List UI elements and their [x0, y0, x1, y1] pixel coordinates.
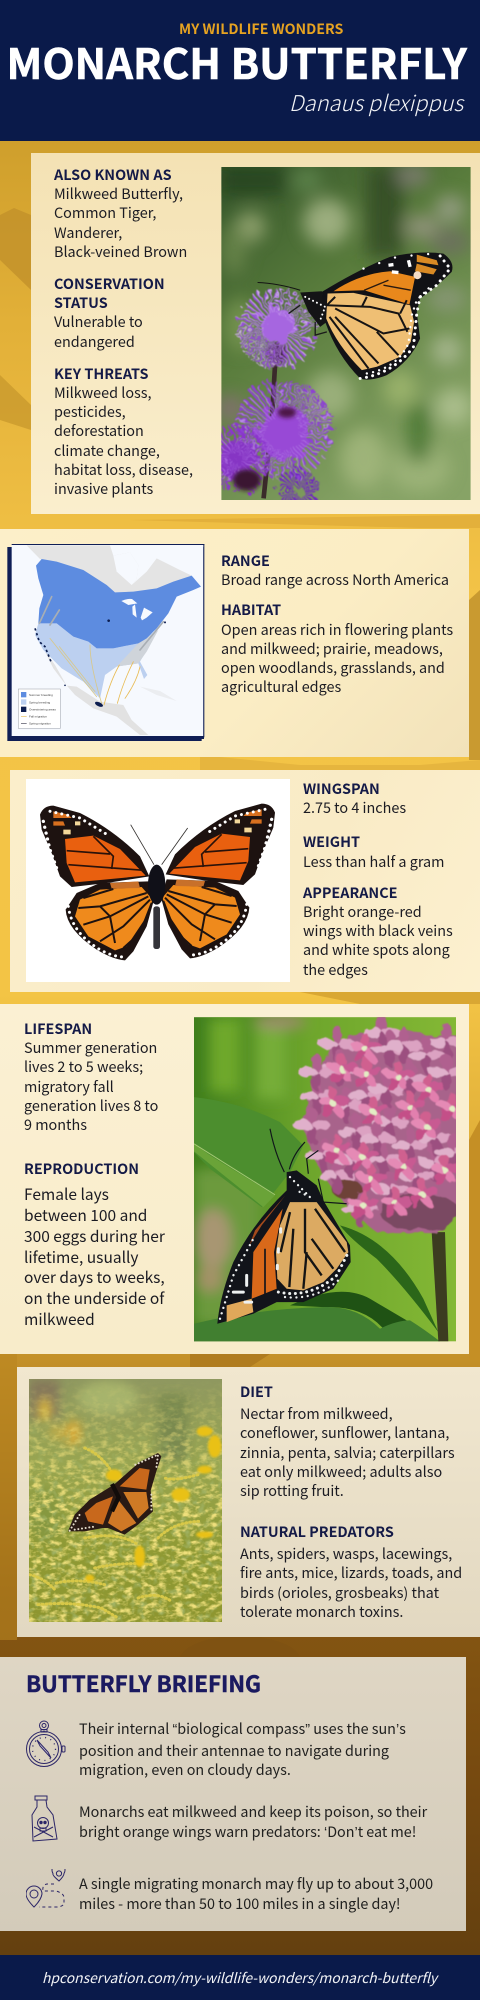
- photo: monarch in goldenrod: [29, 1379, 222, 1622]
- legend: Spring breeding: [29, 700, 51, 704]
- panel: butterfly briefing: [0, 1657, 466, 1931]
- legend: Fall migration: [29, 715, 47, 719]
- text: diet: DIET: [240, 1381, 273, 1402]
- icon: compass: [26, 1720, 66, 1767]
- flowers: [264, 362, 275, 498]
- photo: monarch on milkweed: [194, 1017, 456, 1342]
- text: reproduction: between 100 and: [24, 1204, 147, 1226]
- grey land: [27, 545, 192, 592]
- text: natural predators: birds (orioles, grosbeaks) that: [240, 1582, 439, 1603]
- text: names, status, threats: ALSO KNOWN AS: [54, 164, 172, 185]
- antennae: [131, 825, 188, 865]
- panel: diet and predators: [17, 1367, 480, 1637]
- text: reproduction: Female lays: [24, 1183, 109, 1205]
- text: reproduction: 300 eggs during her: [24, 1225, 165, 1247]
- panel: size and appearance: [10, 770, 480, 992]
- fact: migration distance: [26, 1869, 433, 1914]
- text: reproduction: on the underside of: [24, 1287, 164, 1309]
- legend: Summer breeding: [29, 693, 53, 697]
- text: natural predators: [240, 1521, 462, 1622]
- photo: monarch on purple blazing star: [221, 167, 471, 500]
- fact text: A single migrating monarch may fly up to about 3,000: [79, 1873, 433, 1894]
- text: lifespan: migratory fall: [24, 1076, 114, 1097]
- fact text: [79, 1718, 406, 1780]
- text: range and habitat: Broad range across North America Open areas rich in flowering plants: [221, 569, 453, 640]
- text: natural predators: NATURAL PREDATORS: [240, 1521, 394, 1542]
- fact text: Monarchs eat milkweed and keep its poison, so their: [79, 1801, 427, 1822]
- text: reproduction: [24, 1158, 165, 1330]
- legend: [18, 689, 60, 728]
- text: names, status, threats: habitat loss, disease,: [54, 459, 193, 480]
- text: lifespan: lives 2 to 5 weeks;: [24, 1056, 143, 1077]
- text: names, status, threats: [54, 164, 193, 499]
- fact text: miles - more than 50 to 100 miles in a single day!: [79, 1892, 401, 1914]
- text: names, status, threats: endangered Milkweed loss,: [54, 331, 152, 403]
- scientific name: Danaus plexippus: [289, 87, 463, 118]
- fact text: migration, even on cloudy days.: [79, 1759, 291, 1780]
- fact text: position and their antennae to navigate during: [79, 1740, 389, 1760]
- text: reproduction: REPRODUCTION: [24, 1158, 139, 1179]
- text: range and habitat: [221, 550, 453, 697]
- text: names, status, threats: pesticides,: [54, 401, 126, 422]
- butterfly: [258, 283, 300, 290]
- great lakes: [121, 599, 153, 620]
- header band: [0, 0, 480, 141]
- text: reproduction: lifetime, usually: [24, 1246, 138, 1268]
- fact text: [79, 1801, 428, 1842]
- text: natural predators: Ants, spiders, wasps, lacewings,: [240, 1543, 452, 1564]
- legend: Spring migration: [29, 722, 51, 726]
- photo: spread-wing monarch on white: [26, 779, 290, 982]
- text: wingspan, weight, appearance: WINGSPAN: [303, 778, 380, 799]
- text: diet: eat only milkweed; adults also: [240, 1461, 442, 1482]
- text: diet: [240, 1381, 455, 1501]
- fact text: [79, 1873, 433, 1914]
- leaves: [194, 1097, 303, 1207]
- panel: lifespan and reproduction: [0, 1004, 469, 1354]
- summer breeding: [36, 559, 201, 648]
- spring breeding: [35, 623, 157, 698]
- text: diet: Nectar from milkweed,: [240, 1403, 393, 1424]
- text: names, status, threats: Milkweed Butterfly,: [54, 183, 183, 204]
- text: reproduction: milkweed: [24, 1308, 95, 1330]
- overwintering: [35, 619, 166, 708]
- legend: Overwintering areas: [29, 707, 56, 711]
- text: lifespan: 9 months: [24, 1114, 87, 1135]
- text: lifespan: LIFESPAN: [24, 1018, 92, 1039]
- fact text: bright orange wings warn predators: ‘Don’t eat me!: [79, 1820, 416, 1842]
- text: natural predators: tolerate monarch toxins.: [240, 1601, 403, 1622]
- text: wingspan, weight, appearance: 2.75 to 4 inches Less than half a gram Bright orange-red: [303, 797, 444, 922]
- text: diet: coneflower, sunflower, lantana,: [240, 1422, 449, 1443]
- fact text: Their internal “biological compass” uses the sun’s: [79, 1718, 406, 1739]
- panel: range and habitat: [0, 529, 469, 757]
- text: names, status, threats: deforestation: [54, 420, 144, 441]
- heading: BUTTERFLY BRIEFING: [26, 1667, 261, 1699]
- text: wingspan, weight, appearance: wings with black veins: [303, 920, 453, 941]
- footer band: [0, 1955, 480, 2000]
- milkweed flower: [293, 1013, 472, 1234]
- body: [148, 865, 165, 905]
- text: range and habitat: RANGE: [221, 550, 270, 571]
- text: names, status, threats: STATUS: [54, 292, 108, 313]
- text: wingspan, weight, appearance: WEIGHT: [303, 831, 360, 852]
- main title: MONARCH BUTTERFLY: [6, 31, 467, 92]
- text: names, status, threats: Common Tiger,: [54, 202, 156, 223]
- text: diet: sip rotting fruit.: [240, 1480, 344, 1501]
- migration lines: [39, 597, 163, 705]
- website url: hpconservation.com/my-wildlife-wonders/monarch-butterfly: [42, 1967, 437, 1987]
- map: monarch range in North America: [7, 544, 204, 741]
- text: names, status, threats: CONSERVATION: [54, 273, 165, 294]
- text: names, status, threats: KEY THREATS: [54, 363, 149, 384]
- text: names, status, threats: climate change,: [54, 440, 160, 461]
- text: wingspan, weight, appearance: [303, 778, 453, 980]
- text: names, status, threats: Wanderer,: [54, 222, 122, 243]
- butterfly: [68, 1453, 162, 1535]
- text: range and habitat: agricultural edges: [221, 676, 341, 697]
- text: lifespan: [24, 1018, 158, 1135]
- text: diet: zinnia, penta, salvia; caterpillars: [240, 1442, 455, 1463]
- text: names, status, threats: invasive plants: [54, 478, 153, 499]
- fact: biological compass: [26, 1718, 406, 1780]
- text: range and habitat: HABITAT: [221, 599, 281, 620]
- text: wingspan, weight, appearance: APPEARANCE: [303, 882, 398, 903]
- text: lifespan: generation lives 8 to: [24, 1095, 158, 1116]
- text: wingspan, weight, appearance: and white spots along: [303, 939, 450, 960]
- text: lifespan: Summer generation: [24, 1037, 157, 1058]
- icon: route with map pins: [26, 1869, 66, 1908]
- text: range and habitat: and milkweed; prairie, meadows,: [221, 638, 443, 659]
- text: range and habitat: open woodlands, grasslands, and: [221, 657, 445, 678]
- fact: milkweed poison: [32, 1796, 428, 1842]
- butterfly: [270, 1129, 347, 1204]
- icon: poison bottle: [32, 1796, 58, 1842]
- text: wingspan, weight, appearance: the edges: [303, 959, 368, 980]
- text: reproduction: over days to weeks,: [24, 1266, 165, 1288]
- text: natural predators: fire ants, mice, lizards, toads, and: [240, 1562, 462, 1583]
- text: names, status, threats: Black-veined Brown Vulnerable to: [54, 241, 187, 332]
- series title: MY WILDLIFE WONDERS: [179, 19, 343, 39]
- panel: identity: [31, 153, 480, 514]
